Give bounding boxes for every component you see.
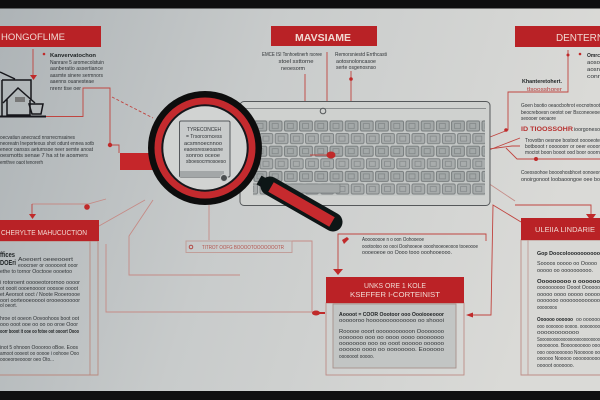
text block: centre right note: Remorsniestd Errthcasti: [335, 52, 387, 58]
document inside lens: eaoesresseoasne: [184, 147, 223, 153]
document inside lens: sonroo oceoe: [186, 153, 220, 159]
text block: centre left note: stoel ssttorne: [278, 59, 314, 65]
panel: bottom right: oooooooooooo: [537, 330, 579, 336]
text block: right column: onoirgonoot loobaoongoe oee bo: [521, 177, 600, 183]
panel: bottom left: ooo ooot ooe oo oo oo oroe Ooor: [0, 322, 78, 328]
header: right: [515, 26, 600, 47]
text block: right column: seoooer oeoaore: [521, 116, 556, 122]
panel: bottom left: et Aeorsot ooct / Noote Rooeroooe: [0, 292, 80, 298]
keyboard marker dot: [310, 152, 336, 158]
text block: top left: aanberatio assertiance: [50, 66, 103, 72]
text block: middle left: [0, 135, 94, 166]
panel: bottom right: [521, 218, 600, 375]
icon: house: [0, 72, 46, 116]
document inside lens: = Trsorcorncess: [186, 134, 222, 140]
panel: bottom left: DOEri: [0, 260, 16, 267]
connector lines: [32, 49, 600, 315]
panel: bottom right: Oooooo oooooo: [537, 317, 574, 323]
text block: right column: Khanteretohert.: [522, 79, 562, 85]
text block: centre left note: EMCE ISI Tonhoetinerh rsoree: [262, 52, 322, 58]
text block: centre right note: aotosnoloncasoe: [336, 59, 376, 65]
top frame bar: [0, 0, 600, 8]
text block: right column: tlsoosshorer: [527, 87, 562, 93]
text block: top right: conr: [587, 74, 600, 80]
text block: centre left note: [262, 52, 322, 72]
panel: bottom left: ethe to tornor Ooctooe oooetoo: [0, 269, 72, 275]
text block: top right: aoso: [587, 60, 600, 66]
panel: bottom centre: UNKS ORE 1 KOLE: [364, 281, 426, 290]
document inside lens: [180, 121, 230, 182]
text block: note above centre panel: Aoooooooe n o oon Oohooeoe: [362, 237, 424, 243]
panel: bottom left: ffices: [0, 252, 15, 259]
panel: bottom left: inot 5 ohnoon Ooooroo oBoe. Eoos: [0, 345, 78, 351]
panel: bottom centre: ooooooot ooooo.: [339, 354, 374, 360]
panel: bottom left: oorr booot it ooe oo fotoe oot oooort Oooo: [0, 329, 79, 335]
header: centre: MAVSIAME: [295, 32, 351, 44]
panel: bottom centre: oooooroo hoooooooooooooo oo shoooi: [339, 318, 444, 324]
text block: middle left: eneor oansss aeturnsoe neer semte anoat: [0, 147, 93, 153]
text block: centre right note: [335, 52, 387, 71]
panel: bottom right: ooooot ooooooo.: [537, 363, 574, 369]
panel: bottom right: ooooo oo oooooooooo.: [537, 268, 593, 274]
text block: top left: aaenns ouanesteae: [50, 79, 94, 85]
panel: bottom right: Gop Doocoloooooooooo: [537, 251, 600, 257]
panel: bottom right: ULEIIA LINDARIE: [535, 227, 595, 234]
header: left: [0, 26, 101, 47]
panel: bottom left: hroe ot ooeon Oovoohoos boot oot: [0, 316, 79, 322]
label box: centre: [186, 241, 292, 252]
text block: right column: [521, 79, 600, 183]
text block: middle left: oesmotts senae 7 ha st te aosmers: [0, 153, 88, 159]
text block: top left: aasmte sinere sermnors: [50, 73, 103, 79]
text block: top left: nrenr tise oer: [50, 86, 81, 92]
panel: bottom right: ooooooos: [537, 305, 557, 311]
document inside lens: sboesocrmosoeso: [186, 159, 226, 165]
document inside lens: acsmnoecnnoo: [184, 141, 222, 147]
panel: bottom left: oori oorteooeooooi orooeoooooor: [0, 298, 80, 304]
panel: bottom left: CHERYLTE MAHUCUCTION: [1, 230, 87, 237]
text block: top left: Nanrare 5 aromecolstuin: [50, 60, 104, 66]
magnifier handle: [259, 180, 333, 222]
text block: middle left: neoreatn Ineporteous shot odunt ennea sotb: [0, 141, 94, 147]
text block: note above centre panel: [362, 237, 478, 256]
header: centre: [271, 26, 377, 46]
panel: bottom left: ol oeort.: [0, 303, 17, 309]
panel: bottom centre: Rooooe ooort ooooooooooon Oooooooo: [339, 329, 444, 335]
panel: bottom left: amoot oooeot oo ooooe i oohooe Ooo: [0, 351, 79, 357]
panel: bottom right: Soooos ooooo oo Ooooo: [537, 261, 597, 267]
panel: bottom centre: KSEFFER I-CORTEINIST: [350, 290, 440, 299]
keyboard: [240, 102, 490, 206]
text block: centre right note: serte osgenosnso: [336, 65, 376, 71]
panel: bottom left: ot oooit oooenoooor ooosoe oooot: [0, 286, 78, 292]
text block: top right: aosn: [587, 67, 600, 73]
text block: top right: [587, 53, 600, 80]
document inside lens: TYRECONCEH: [187, 127, 221, 133]
panel: bottom left: eoocrser or ooooceot ooor: [18, 263, 78, 269]
panel: bottom right: ooooooo ooooooooooooo: [537, 298, 600, 304]
text block: top left: Kanvervatochon: [50, 53, 97, 59]
panel: bottom centre: [326, 277, 464, 375]
panel: bottom centre: ooooooo ooo oo oooo oooo oooooooo: [339, 335, 444, 341]
text block: centre left note: neoesorm: [281, 66, 305, 72]
panel: bottom left: oooeoroeoooor oeo Oto...: [0, 357, 54, 363]
connector dots and arrowheads: [29, 53, 596, 317]
panel: bottom centre: oooooooo ooo oo ooot oooooo oooooo: [339, 341, 444, 347]
magnifier lens: [152, 94, 258, 202]
text block: middle left: oecvatiun anecracd nnsrrecrnsaines: [0, 135, 75, 141]
panel: bottom left: Aoeoert oeeeooert: [18, 257, 74, 263]
label box: centre: TITROT OOFG BOOOOTOOOOOOOTR: [202, 245, 284, 251]
panel: bottom right: Ooooooooo o oooooo: [537, 279, 600, 285]
panel: bottom right: ooooo oooo ooooo ooooo: [537, 292, 600, 298]
header: left: HONGOFLIME: [1, 32, 65, 43]
panel: bottom left: i rotoroent ooooeotorornoo oooor: [0, 280, 80, 286]
text block: right column: ID TIOOSSOHR: [521, 126, 573, 133]
panel: bottom left: [0, 220, 99, 375]
text block: note above centre panel: oooeoeoe oo Oooo tooo ooohooeooo.: [362, 250, 452, 256]
text block: middle left: emthve oaot tenorerh: [0, 160, 43, 166]
panel: bottom centre: oooooo oooo oo oooooooo. Eoooooo: [339, 347, 444, 353]
bottom frame bar: [0, 391, 600, 400]
red tab behind magnifier: [120, 153, 156, 170]
text block: note above centre panel: oootootoo oo oooi Ooohooeoe oooohooeoeoooo tooeoooe: [362, 244, 478, 250]
panel: bottom centre: Aoooot = COOR Oootoor ooo Oooiooeooor: [339, 312, 445, 318]
text block: top left: [50, 53, 104, 92]
